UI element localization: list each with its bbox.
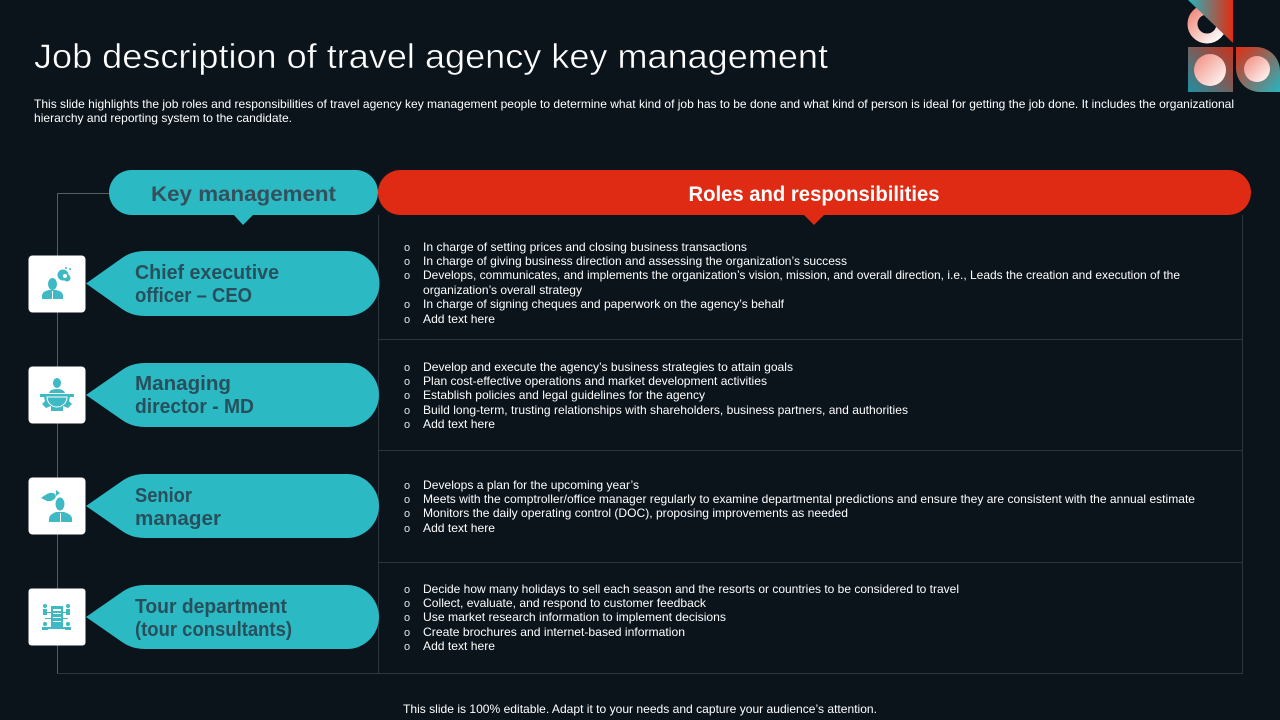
label pill: managing director: Managing (135, 373, 231, 395)
responsibilities list: CEO: Add text here (423, 312, 495, 326)
responsibilities list: MD: o (404, 362, 410, 374)
label pill: tour department (86, 585, 379, 649)
row 4: tour department (28, 582, 959, 653)
responsibilities list: MD: o (404, 376, 410, 388)
decorative logo icon (1188, 0, 1280, 92)
responsibilities list: CEO: In charge of setting prices and closing business transactions (423, 240, 747, 254)
responsibilities list: MD: o (404, 405, 410, 417)
intro text block (34, 97, 1234, 125)
icon: building with people (28, 588, 86, 646)
responsibilities list: tour department: Use market research information to implement decisions (423, 610, 726, 624)
responsibilities list: senior manager: o (404, 523, 410, 535)
responsibilities list: CEO: o (404, 314, 410, 326)
label pill: chief executive officer: officer – CEO (135, 285, 252, 307)
table frame lines (58, 215, 1242, 674)
responsibilities list: MD: Establish policies and legal guidelines for the agency (423, 388, 705, 402)
responsibilities list: CEO: o (404, 242, 410, 254)
responsibilities list: senior manager: o (404, 480, 410, 492)
responsibilities list: tour department: o (404, 627, 410, 639)
responsibilities list: tour department: Add text here (423, 639, 495, 653)
title: Job description of travel agency key management (34, 38, 828, 76)
header: key management (109, 170, 378, 225)
responsibilities list: MD: Plan cost-effective operations and market development activities (423, 374, 767, 388)
footer note: This slide is 100% editable. Adapt it to your needs and capture your audience’s attention. (403, 702, 877, 716)
responsibilities list: tour department (404, 582, 959, 653)
icon: executive with gears (28, 256, 86, 312)
header: key management: Key management (151, 183, 336, 206)
responsibilities list: CEO: o (404, 270, 410, 282)
label pill: chief executive officer: Chief executive (135, 262, 279, 284)
responsibilities list: MD: Add text here (423, 417, 495, 431)
responsibilities list: tour department: o (404, 612, 410, 624)
responsibilities list: tour department: o (404, 641, 410, 653)
label pill: managing director: director - MD (135, 396, 254, 418)
responsibilities list: senior manager: Meets with the comptroller/office manager regularly to examine departmental predictions and ensure they are consistent with the annual estimate (423, 492, 1195, 506)
label pill: senior manager (86, 474, 379, 538)
header: roles and responsibilities: Roles and responsibilities (688, 183, 940, 206)
label pill: managing director (86, 363, 379, 427)
label pill: senior manager: Senior (135, 485, 192, 507)
header: roles and responsibilities (378, 170, 1251, 225)
responsibilities list: MD: o (404, 419, 410, 431)
responsibilities list: MD (404, 360, 908, 431)
responsibilities list: tour department: Decide how many holidays to sell each season and the resorts or countries to be considered to travel (423, 582, 959, 596)
label pill: tour department: Tour department (135, 596, 287, 618)
responsibilities list: CEO: Develops, communicates, and implements the organization’s vision, mission, and overall direction, i.e., Leads the creation and execution of the (423, 268, 1180, 282)
icon: manager with gear (28, 366, 86, 424)
responsibilities list: tour department: o (404, 598, 410, 610)
label pill: tour department: (tour consultants) (135, 619, 292, 641)
responsibilities list: CEO: In charge of signing cheques and paperwork on the agency’s behalf (423, 297, 785, 311)
responsibilities list: CEO: In charge of giving business direction and assessing the organization’s success (423, 254, 847, 268)
responsibilities list: senior manager: Add text here (423, 521, 495, 535)
responsibilities list: MD: Build long-term, trusting relationships with shareholders, business partners, and authorities (423, 403, 908, 417)
responsibilities list: MD: Develop and execute the agency’s business strategies to attain goals (423, 360, 793, 374)
row 2: MD (28, 360, 908, 431)
icon: manager with arrows (28, 478, 86, 534)
responsibilities list: senior manager: o (404, 494, 410, 506)
intro text block: This slide highlights the job roles and responsibilities of travel agency key management people to determine what kind of job has to be done and what kind of person is ideal for getting the job done. It includes the organizational (34, 97, 1234, 111)
responsibilities list: senior manager (404, 478, 1195, 535)
responsibilities list: tour department: o (404, 584, 410, 596)
responsibilities list: CEO: organization’s overall strategy (423, 283, 582, 297)
label pill: senior manager: manager (135, 508, 221, 530)
responsibilities list: senior manager: Develops a plan for the upcoming year’s (423, 478, 639, 492)
responsibilities list: CEO: o (404, 299, 410, 311)
responsibilities list: CEO (404, 240, 1180, 326)
row 3: senior manager (28, 474, 1195, 538)
responsibilities list: tour department: Collect, evaluate, and respond to customer feedback (423, 596, 707, 610)
responsibilities list: tour department: Create brochures and internet-based information (423, 625, 685, 639)
label pill: chief executive officer (86, 251, 380, 316)
intro text block: hierarchy and reporting system to the candidate. (34, 111, 292, 125)
responsibilities list: senior manager: o (404, 508, 410, 520)
connector line (58, 194, 110, 674)
responsibilities list: senior manager: Monitors the daily operating control (DOC), proposing improvements as needed (423, 506, 848, 520)
responsibilities list: MD: o (404, 390, 410, 402)
responsibilities list: CEO: o (404, 256, 410, 268)
row 1: CEO (28, 240, 1180, 326)
